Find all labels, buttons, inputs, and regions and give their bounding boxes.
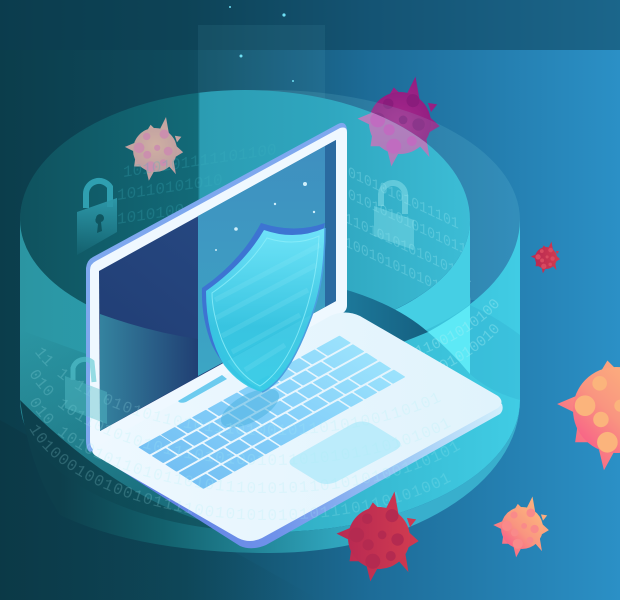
laptop screen [99, 140, 336, 431]
light facet under diamond [470, 305, 520, 400]
binary text: band around the laptop: 010 101101010101110101001011010101110101001 [30, 370, 451, 465]
bright diamond [428, 305, 470, 374]
binary text: back wall left: 10110101010 [117, 171, 223, 205]
laptop deck [92, 312, 502, 541]
binary text: band around the laptop: 11 1 11 010101101011101001011010100110101 [35, 348, 440, 435]
icon: padlock lower left [65, 359, 107, 424]
binary text: band around the laptop: 1010001001001011110010101010101110110101001 [30, 424, 451, 520]
virus: small orange [493, 496, 549, 557]
screen right strip [325, 140, 336, 307]
dark lower-left wedge [0, 420, 320, 600]
binary text: back wall right: 01010101011101 [348, 165, 459, 234]
shield shadow on keys [215, 381, 285, 435]
top band [0, 0, 620, 50]
binary text: back wall left: 1010100 [117, 201, 184, 229]
hinge bar [178, 375, 227, 403]
binary text: band around the laptop: 010 1010101101011010111010101101010100110101 [30, 398, 460, 493]
light column [198, 25, 325, 105]
shield [202, 223, 325, 392]
virus: large orange [557, 346, 620, 470]
virus: magenta [358, 76, 440, 166]
virus: small red [531, 242, 560, 273]
right inner bright region [340, 220, 470, 350]
binary text: back wall right: 1101010101010111 [345, 211, 472, 288]
shield face [206, 228, 325, 392]
front wall lower-left shade [20, 330, 270, 532]
dark crescent [340, 288, 428, 352]
screen lower band [100, 314, 198, 431]
virus: magenta seen through wall [358, 112, 430, 166]
shield right edge [262, 228, 325, 392]
keyboard [140, 336, 404, 488]
screen stars [215, 182, 315, 251]
icon: padlock back right [374, 183, 414, 250]
bottom plate [20, 400, 520, 553]
binary text: back wall right: 010101010101011 [348, 187, 467, 260]
icon: padlock left [77, 181, 117, 255]
front wall [20, 220, 520, 532]
stars [229, 6, 294, 82]
laptop base edge [92, 318, 503, 548]
binary text: wall column right: 0110101010010 [440, 324, 498, 367]
shield inner line [212, 236, 319, 386]
virus: pale [125, 117, 183, 181]
binary text: back wall left [117, 141, 277, 229]
binary text: band around the laptop [30, 348, 460, 520]
binary text: wall column right: 1011001010100 [416, 299, 498, 354]
inner back wall [20, 90, 470, 340]
laptop lid outer [86, 123, 347, 452]
binary text: back wall right [345, 165, 472, 311]
shield stripes [215, 245, 320, 370]
screen light column [198, 146, 325, 376]
binary text: back wall left: 1010101111101100 [123, 141, 277, 182]
laptop [86, 123, 503, 548]
shield blue back [202, 223, 325, 392]
virus: dark red [337, 492, 419, 581]
outer back ring [20, 90, 520, 300]
touchpad [290, 422, 401, 484]
binary text: back wall right: 1001010101011100 [345, 235, 472, 311]
